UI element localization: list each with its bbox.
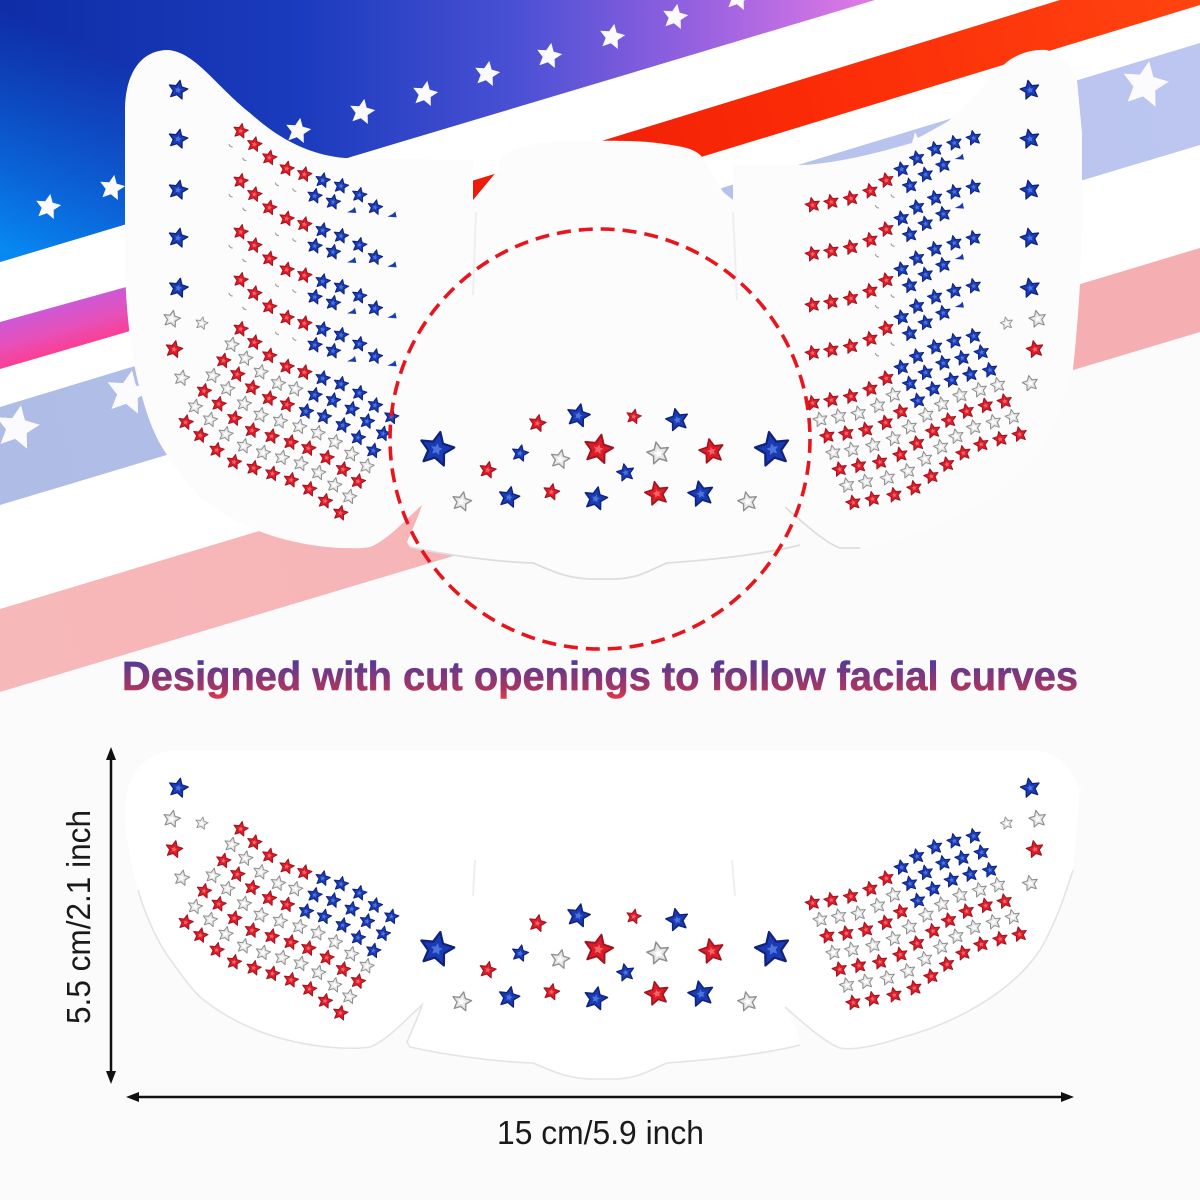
right star flag, upper — [804, 276, 1047, 510]
white stars on the bands — [0, 0, 1172, 450]
center star arc, lower — [417, 902, 792, 1012]
width label: 15 cm/5.9 inch — [497, 1114, 704, 1151]
left star flag, upper — [162, 276, 400, 521]
right star flag, lower — [804, 776, 1047, 1010]
left star flag, lower — [162, 776, 400, 1021]
right column of blue stars — [1019, 78, 1041, 248]
right wing strips of stars — [804, 129, 982, 361]
top sticker: white sheet with wing strips and cut openings — [125, 50, 1082, 579]
arrow: height dimension — [106, 747, 116, 1084]
height label: 5.5 cm/2.1 inch — [60, 810, 97, 1024]
left column of blue stars — [167, 78, 189, 248]
lower sticker: flat view — [125, 750, 1082, 1079]
center star arc, upper — [417, 402, 792, 512]
left wing strips of stars — [229, 122, 397, 366]
arrow: width dimension — [126, 1092, 1074, 1102]
heading: Designed with cut openings to follow facial curves — [122, 653, 1078, 699]
dashed red highlight circle — [390, 229, 810, 649]
